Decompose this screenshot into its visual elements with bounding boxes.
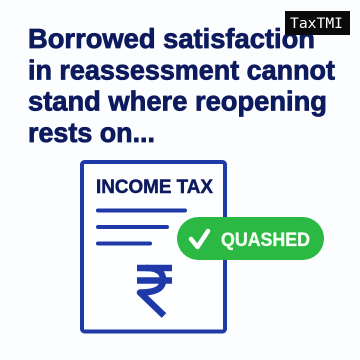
- title: stand where reopening: [28, 86, 327, 116]
- title: rests on...: [28, 117, 155, 148]
- icon: check mark: [191, 231, 208, 247]
- watermark tag: TaxTMI: [290, 16, 343, 32]
- text lines: [98, 210, 185, 244]
- pill label: QUASHED: [221, 230, 310, 251]
- icon: rupee symbol: [137, 268, 172, 316]
- document heading: INCOME TAX: [96, 176, 213, 198]
- document outline: [82, 162, 225, 332]
- document icon: [82, 162, 225, 332]
- title: [28, 23, 335, 148]
- watermark tag: [285, 11, 350, 35]
- title: in reassessment cannot: [28, 54, 335, 86]
- title: Borrowed satisfaction: [28, 23, 315, 54]
- status pill: quashed: [177, 217, 324, 260]
